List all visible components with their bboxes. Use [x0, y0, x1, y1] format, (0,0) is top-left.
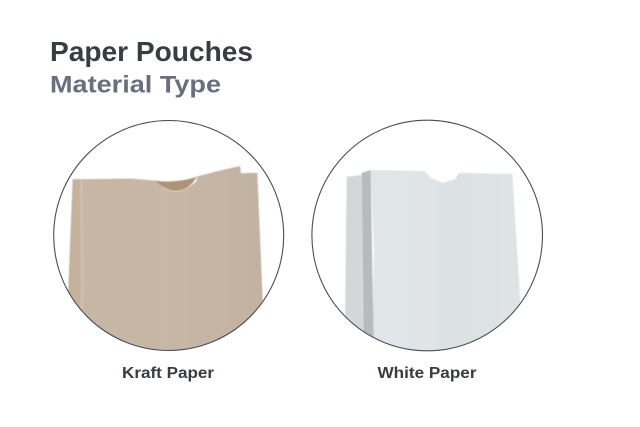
- infographic: [52, 41, 544, 382]
- panel: kraft paper: [54, 120, 284, 382]
- title: Paper Pouches: [50, 36, 253, 67]
- image: kraft paper bag: [62, 166, 266, 360]
- subtitle: Material Type: [50, 72, 221, 98]
- image: white paper bag: [344, 170, 524, 360]
- circle outline: [312, 120, 542, 351]
- label: white paper: White Paper: [378, 365, 476, 382]
- circle outline: [54, 120, 284, 350]
- panel: white paper: [312, 120, 542, 382]
- label: kraft paper: Kraft Paper: [122, 365, 214, 382]
